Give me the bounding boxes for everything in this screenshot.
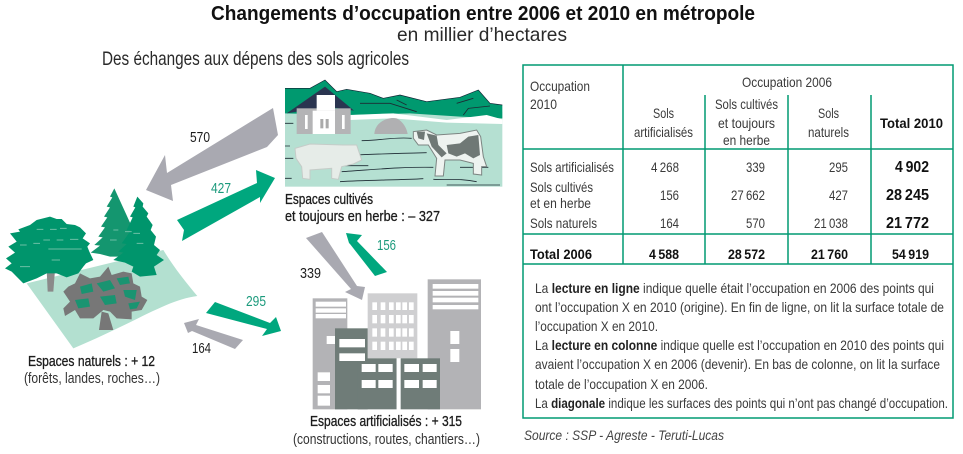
value: 570: 570: [190, 130, 210, 146]
label: cultivated land: et toujours en herbe : – 327: [285, 209, 440, 225]
table values: 28 245: [886, 187, 929, 204]
label: cultivated land: Espaces cultivés: [285, 192, 373, 208]
table values: 21 772: [886, 215, 929, 232]
reading notes: l’occupation X en 2010.: [535, 318, 658, 334]
arrow: 570: [146, 108, 278, 201]
subtitle: en millier d’hectares: [397, 24, 567, 46]
value: 339: 339: [300, 266, 321, 282]
label: built-up areas: Espaces artificialisés : + 315: [310, 414, 462, 430]
table header: en herbe: [723, 132, 770, 148]
arrow: 295: [206, 302, 281, 336]
value: 295: 295: [246, 294, 266, 310]
table values: 4 588: [649, 246, 679, 262]
arrow: 339: [306, 232, 365, 300]
table header: Total 2010: [880, 115, 943, 131]
arrow: 164: [184, 319, 243, 349]
table values: 4 902: [895, 159, 929, 176]
arrow: 156: [346, 233, 387, 276]
table header: naturels: [808, 124, 849, 140]
title: Changements d’occupation entre 2006 et 2010 en métropole: [211, 3, 755, 25]
label: natural spaces: (forêts, landes, roches…): [24, 371, 160, 387]
label: natural spaces: Espaces naturels : + 12: [28, 354, 155, 370]
illustration: natural spaces: [5, 188, 197, 348]
row labels: Sols artificialisés: [530, 159, 614, 175]
row labels: Sols cultivés: [530, 179, 593, 195]
table values: 54 919: [892, 246, 929, 262]
table header: Sols: [818, 105, 839, 121]
table values: 28 572: [728, 246, 765, 262]
table values: 4 268: [651, 160, 679, 175]
table values: 21 760: [811, 246, 848, 262]
value: 164: 164: [192, 341, 211, 357]
table header: 2010: [530, 96, 557, 112]
source: Source : SSP - Agreste - Teruti-Lucas: [524, 428, 724, 443]
table values: 164: [660, 216, 679, 231]
table values: 427: [829, 188, 848, 203]
reading notes: [535, 280, 948, 411]
label: built-up areas: (constructions, routes, chantiers…): [293, 432, 480, 448]
table header: artificialisés: [634, 124, 693, 140]
row labels: Sols naturels: [530, 215, 597, 231]
table header: Occupation 2006: [742, 74, 832, 90]
reading notes: totale de l’occupation X en 2006.: [535, 376, 708, 392]
row labels: [530, 159, 614, 262]
table header: [530, 74, 943, 148]
value: 427: 427: [211, 181, 231, 197]
illustration: cultivated land: [285, 80, 502, 187]
table values: 21 038: [814, 216, 848, 231]
table values: 27 662: [731, 188, 765, 203]
table values: 570: [746, 216, 765, 231]
label: cultivated land: [285, 192, 440, 225]
illustration: built-up areas: [313, 279, 481, 409]
table header: Sols cultivés: [715, 96, 778, 112]
row labels: Total 2006: [530, 246, 592, 262]
table header: Occupation: [530, 78, 590, 94]
table values: [649, 159, 929, 262]
table header: et toujours: [718, 115, 775, 131]
table values: 295: [829, 160, 848, 175]
label: natural spaces: [24, 354, 160, 387]
table header: Sols: [653, 105, 674, 121]
value: 156: 156: [377, 238, 396, 254]
label: built-up areas: [293, 414, 480, 448]
table values: 156: [660, 188, 679, 203]
heading: exchanges: Des échanges aux dépens des sols agricoles: [102, 48, 409, 70]
table values: 339: [746, 160, 765, 175]
arrow: 427: [177, 170, 275, 241]
panel: table: [523, 65, 953, 418]
row labels: et en herbe: [530, 195, 591, 211]
